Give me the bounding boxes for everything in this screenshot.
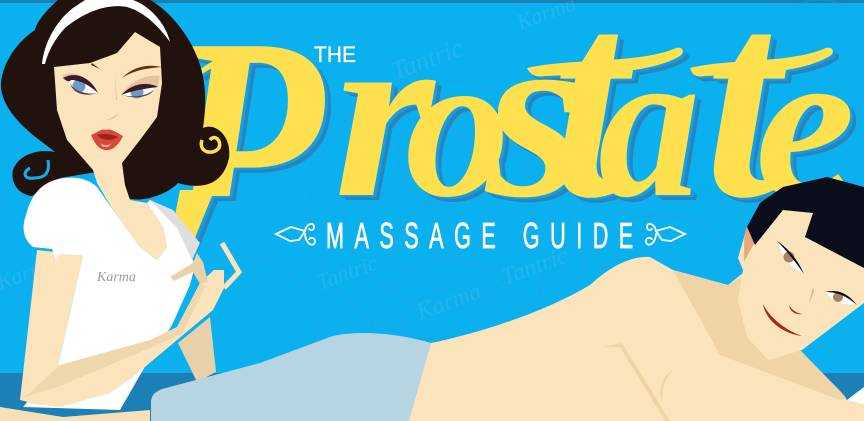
background watermark words: Karma [412, 278, 485, 326]
dress [23, 178, 195, 410]
man mouth [763, 304, 802, 336]
background watermark words: Tantric [387, 33, 467, 86]
eyeshadow [62, 73, 160, 92]
title: THE: THE [314, 42, 356, 67]
towel [151, 333, 431, 421]
thumb [222, 243, 239, 288]
man body [409, 257, 864, 421]
eyebrows [91, 63, 162, 78]
right eye [121, 84, 158, 98]
ear [744, 226, 757, 262]
neck shade [673, 270, 847, 400]
title: Prostate: e [755, 4, 855, 242]
ornament right [646, 224, 685, 245]
forearm [25, 270, 224, 407]
background watermark words: Tantric [313, 250, 381, 295]
background watermark words: Tantric [498, 243, 572, 291]
lips [91, 129, 123, 150]
man [409, 177, 864, 421]
lap [0, 407, 150, 421]
swash: P top [197, 50, 290, 76]
title: Prostate [166, 34, 856, 251]
sky gap [800, 303, 864, 373]
hairband [42, 0, 170, 64]
background watermark words [0, 0, 851, 335]
head [738, 187, 864, 360]
left arm [20, 250, 83, 402]
band corner [825, 373, 864, 399]
woman [1, 0, 239, 410]
sheet corner [847, 387, 864, 405]
ornament left [276, 224, 315, 245]
hair curl spiral left [25, 160, 48, 178]
title: Prostate: a [598, 4, 700, 242]
back arm [178, 317, 216, 382]
man hair [747, 177, 864, 268]
bottom band [0, 373, 864, 421]
logo on dress: Karma [96, 270, 136, 285]
swash: t crossbars [527, 48, 683, 77]
title: Prostate: o [405, 9, 510, 241]
neck and chest [54, 32, 167, 260]
hair curl spiral right [201, 138, 220, 152]
top strip [0, 0, 864, 3]
man nostril [789, 305, 802, 314]
dress collar shade [150, 200, 200, 260]
man eye 1 [777, 241, 804, 274]
pec lines [603, 343, 670, 421]
swash: P stem tail [170, 190, 213, 240]
subtitle: MASSAGE GUIDE [326, 216, 633, 256]
man nose [809, 287, 814, 304]
fingers [170, 253, 208, 284]
background watermark words: Tantric [783, 290, 851, 335]
left eye [63, 75, 98, 95]
man eye 2 [825, 291, 857, 305]
forearm shade [25, 283, 206, 397]
hair [1, 0, 229, 200]
nose [106, 72, 119, 120]
